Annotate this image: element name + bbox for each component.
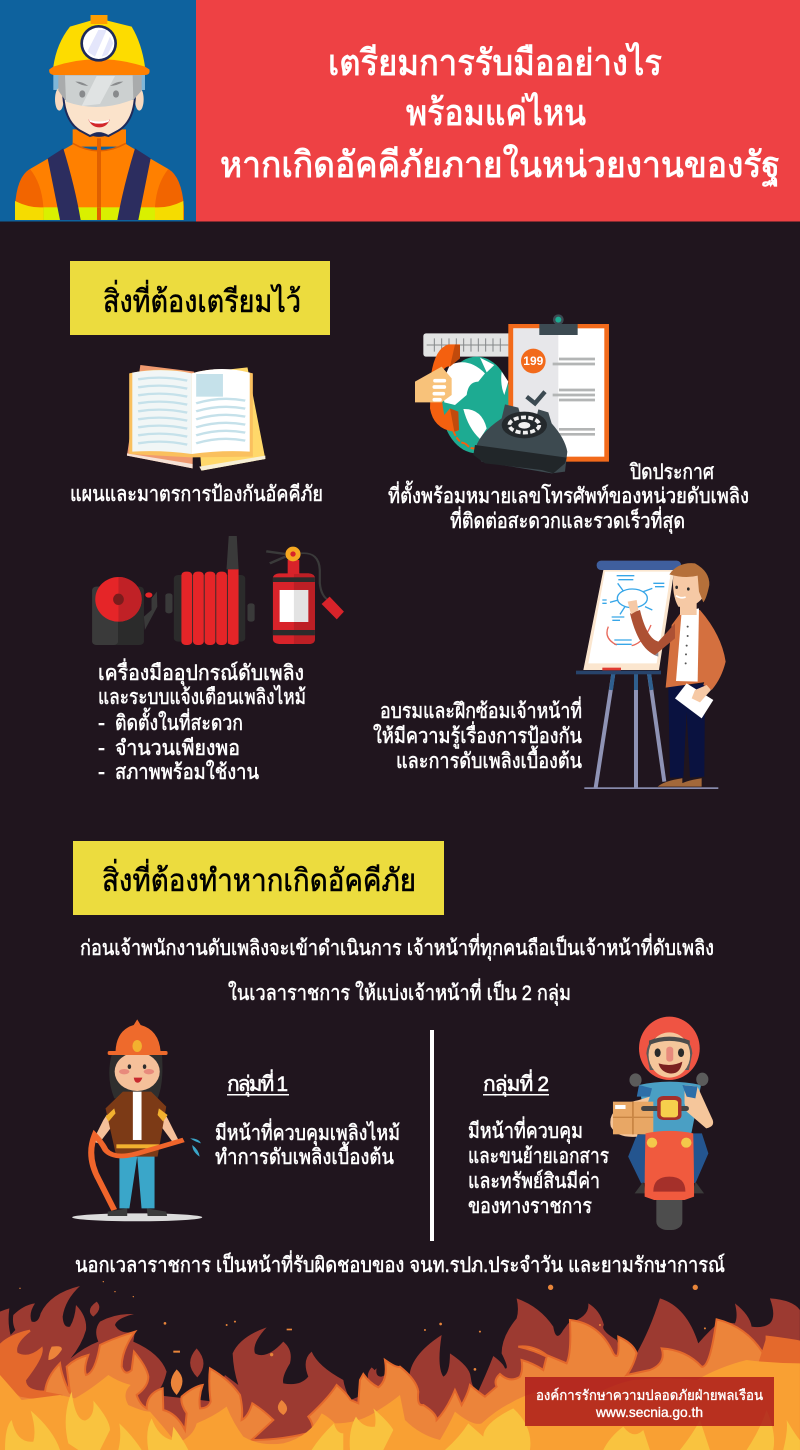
- text: two groups during office hours: ในเวลาราชการ ให้แบ่งเจ้าหน้าที่ เป็น 2 กลุ่ม: [228, 978, 571, 1006]
- text: group 2 duties: ของทางราชการ: [468, 1195, 592, 1218]
- text: group 2 duties: และทรัพย์สินมีค่า: [468, 1169, 600, 1193]
- text: group 1 duties: มีหน้าที่ควบคุมเพลิงไหม้: [215, 1118, 400, 1146]
- text: staff training: [373, 696, 582, 773]
- text: fire equipment and alarm checklist: -: [98, 737, 105, 760]
- text: fire equipment and alarm checklist: ติดตั้งในที่สะดวก: [115, 708, 243, 735]
- heading: what to do when fire occurs: สิ่งที่ต้องทำหากเกิดอัคคีภัย: [102, 859, 416, 898]
- icon: trainer at flip chart: [576, 561, 726, 789]
- heading: things to prepare: [70, 261, 330, 335]
- text: group 2 duties: และขนย้ายเอกสาร: [468, 1145, 609, 1168]
- text: fire equipment and alarm checklist: จำนวนเพียงพอ: [115, 737, 240, 760]
- text: group 1 duties: กลุ่มที่ 1: [227, 1069, 288, 1097]
- text: staff training: ให้มีความรู้เรื่องการป้องกัน: [373, 721, 582, 749]
- text: group 1 duties: ทำการดับเพลิงเบื้องต้น: [215, 1142, 394, 1169]
- header banner: [0, 0, 800, 222]
- text: fire equipment and alarm checklist: -: [98, 712, 105, 735]
- text: group 1 duties: [215, 1069, 400, 1169]
- text: post notice with fire station numbers: ที่ติดต่อสะดวกและรวดเร็วที่สุด: [450, 506, 685, 534]
- text: fire equipment and alarm checklist: และระบบแจ้งเตือนเพลิงไหม้: [98, 685, 306, 709]
- text: fire equipment and alarm checklist: สภาพพร้อมใช้งาน: [115, 760, 259, 784]
- text: fire equipment and alarm checklist: -: [98, 761, 105, 784]
- text: post notice with fire station numbers: [388, 461, 749, 534]
- icon: alarm bell, fire hose and extinguisher: [92, 536, 344, 645]
- footer: organization credit: [525, 1377, 774, 1426]
- text: post notice with fire station numbers: ที่ตั้งพร้อมหมายเลขโทรศัพท์ของหน่วยดับเพลิง: [388, 481, 749, 508]
- text: staff act as firefighters: ก่อนเจ้าพนักงานดับเพลิงจะเข้าดำเนินการ เจ้าหน้าที่ทุกคนถือเป็นเจ้าหน้าที่ดับเพลิง: [80, 933, 714, 961]
- icon: firefighter with hose: [72, 1019, 202, 1221]
- text: group 2 duties: กลุ่มที่ 2: [483, 1069, 549, 1097]
- icon: courier on red scooter: [610, 1017, 713, 1230]
- text: staff training: อบรมและฝึกซ้อมเจ้าหน้าที่: [380, 696, 582, 723]
- text: group 2 duties: [468, 1069, 609, 1218]
- title: [220, 42, 780, 187]
- text: group 2 duties: มีหน้าที่ควบคุม: [468, 1116, 583, 1144]
- title: พร้อมแค่ไหน: [406, 92, 586, 133]
- text: prevention plan: แผนและมาตรการป้องกันอัคคีภัย: [70, 483, 323, 506]
- illustration: flames border: [0, 1281, 800, 1450]
- text: fire equipment and alarm checklist: เครื่องมืออุปกรณ์ดับเพลิง: [98, 658, 304, 686]
- footer: organization credit: องค์การรักษาความปลอดภัยฝ่ายพลเรือน: [536, 1387, 763, 1403]
- icon: firefighter portrait: [15, 15, 184, 220]
- text: post notice with fire station numbers: ปิดประกาศ: [629, 461, 715, 484]
- icon: phone, globe and notice clipboard: [415, 314, 609, 473]
- icon: open book: [127, 365, 265, 471]
- heading: things to prepare: สิ่งที่ต้องเตรียมไว้: [103, 280, 301, 319]
- text: fire equipment and alarm checklist: [98, 658, 306, 784]
- heading: what to do when fire occurs: [73, 841, 444, 915]
- text: staff training: และการดับเพลิงเบื้องต้น: [396, 746, 582, 773]
- footer: organization credit: www.secnia.go.th: [595, 1404, 703, 1420]
- icon: phone, globe and notice clipboard: 199: [523, 355, 544, 368]
- title: เตรียมการรับมืออย่างไร: [328, 42, 662, 83]
